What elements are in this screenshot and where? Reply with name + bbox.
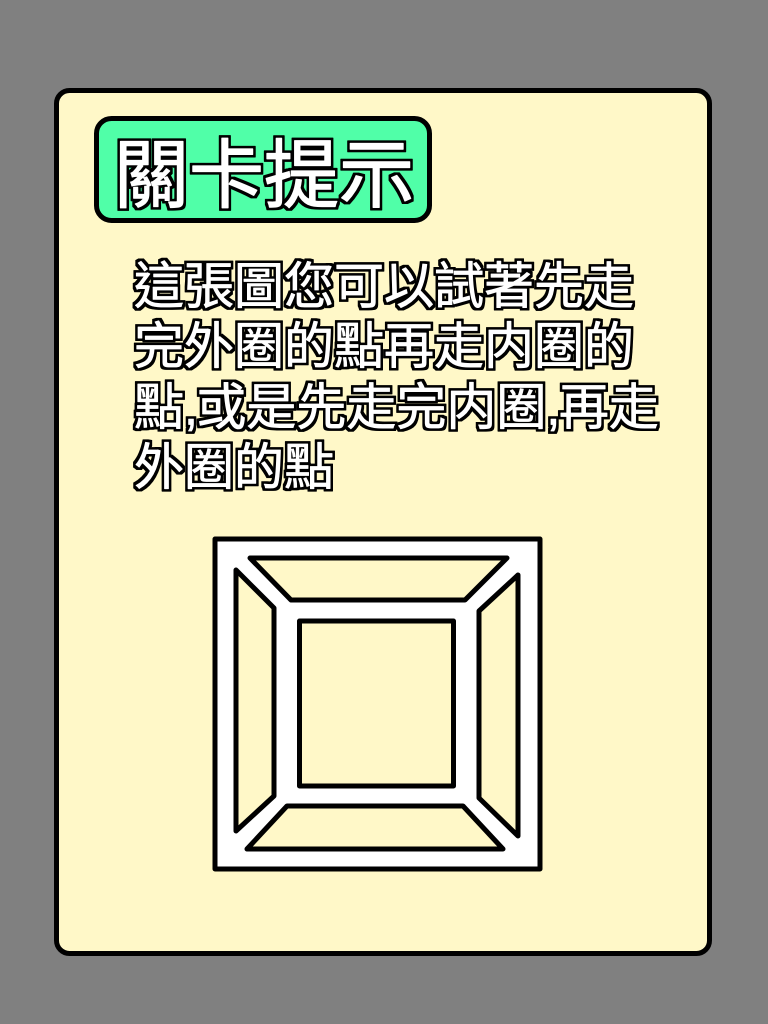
diagram: outer and inner ring paths — [215, 539, 540, 869]
title badge — [96, 118, 430, 220]
hint text: 這張圖您可以試著先走 — [134, 258, 634, 314]
title: 關卡提示 — [114, 134, 414, 218]
right trapezoid — [479, 575, 518, 836]
panel: hint card — [56, 90, 710, 954]
inner square — [300, 621, 454, 786]
top trapezoid — [250, 558, 507, 600]
bottom trapezoid — [247, 806, 503, 849]
outer square — [215, 539, 540, 869]
hint text: 外圈的點 — [134, 440, 334, 496]
hint text: 點,或是先走完内圈,再走 — [134, 380, 659, 436]
hint text: 完外圈的點再走内圈的 — [134, 318, 634, 374]
hint text — [134, 258, 659, 496]
left trapezoid — [236, 570, 274, 831]
